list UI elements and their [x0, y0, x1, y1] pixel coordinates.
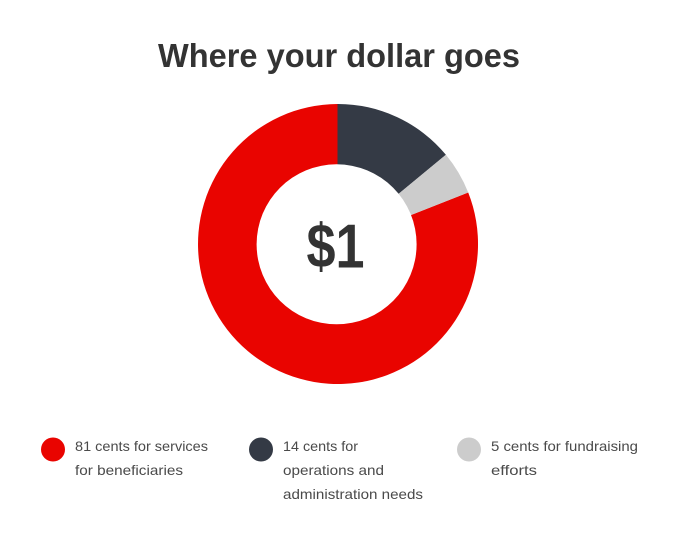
legend text: services: for beneficiaries: [75, 462, 183, 478]
swatch: gray: [457, 438, 481, 462]
legend text: services: [75, 438, 208, 478]
donut chart: [198, 104, 478, 384]
legend text: operations: [283, 438, 423, 502]
legend: [41, 438, 638, 502]
legend text: operations: 14 cents for: [283, 438, 358, 454]
legend text: services: 81 cents for services: [75, 438, 208, 454]
swatch: red: [41, 438, 65, 462]
legend text: fundraising: 5 cents for fundraising: [491, 438, 638, 454]
legend text: operations: administration needs: [283, 486, 423, 502]
legend text: fundraising: [491, 438, 638, 478]
title: Where your dollar goes: [158, 38, 520, 75]
swatch: dark: [249, 438, 273, 462]
legend item: operations: [249, 438, 423, 502]
legend text: operations: operations and: [283, 462, 384, 478]
legend item: fundraising: [457, 438, 638, 478]
legend item: services: [41, 438, 208, 478]
legend text: fundraising: efforts: [491, 462, 537, 478]
center label: $1: [306, 212, 364, 282]
segment: 5 cents fundraising: [398, 155, 468, 215]
segment: 81 cents services: [198, 104, 478, 384]
segment: 14 cents operations: [338, 104, 446, 194]
donut hole: [257, 164, 417, 324]
